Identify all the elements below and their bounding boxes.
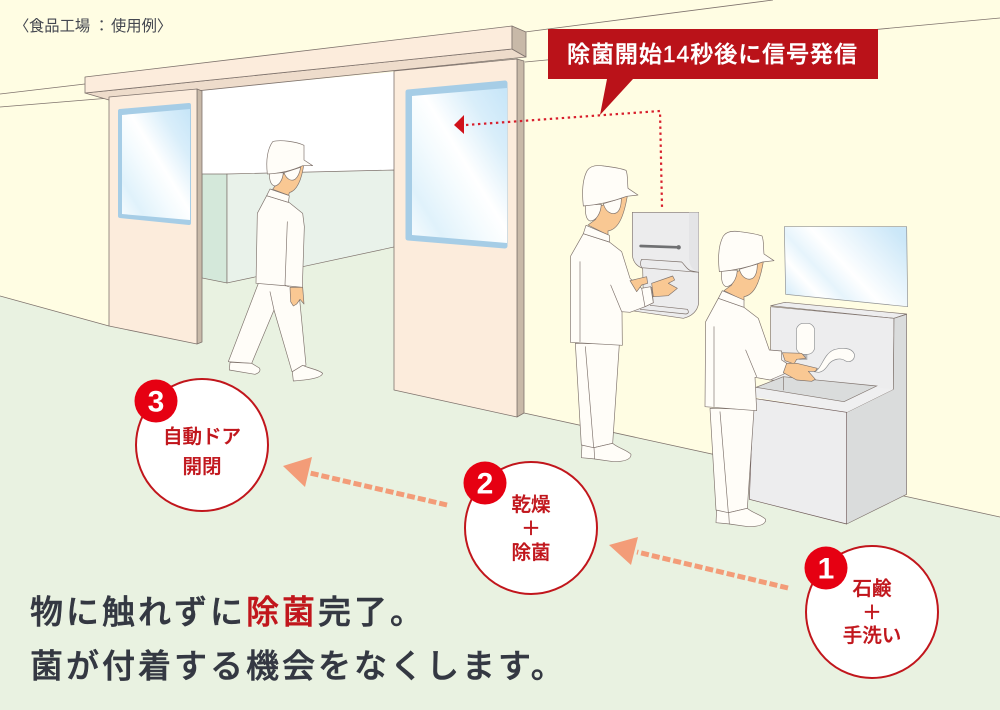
step 3 circle: [134, 379, 268, 511]
callout: [548, 29, 878, 115]
main message: 菌が付着する機会をなくします。: [30, 648, 567, 684]
top label: ：: [94, 18, 109, 35]
step 3 circle: 開閉: [182, 456, 222, 478]
callout: 除菌開始14秒後に信号発信: [567, 41, 857, 67]
badge 2: 2: [477, 468, 493, 500]
left door: [109, 89, 202, 344]
soap dispenser: [796, 323, 815, 360]
right door: [394, 59, 524, 417]
step 1 circle: 手洗い: [843, 625, 901, 647]
ceiling lines: [0, 0, 1000, 107]
top label: 使用例〉: [111, 18, 172, 35]
faucet: [814, 348, 854, 372]
arrow from step 1 to step 2: [609, 537, 788, 588]
sensor rod: [641, 246, 678, 247]
step 3 circle: 自動ドア: [163, 426, 241, 448]
left door window: [120, 105, 190, 223]
mirror: [784, 227, 908, 307]
dotted signal line: [466, 111, 662, 207]
sink cabinet: [771, 302, 907, 318]
step 2 circle: [464, 462, 597, 594]
badge 3: 3: [148, 386, 164, 418]
top label: 〈: [14, 18, 29, 35]
signal arrowhead: [454, 115, 464, 134]
person walking through door: [228, 141, 323, 381]
badge 1: 1: [818, 552, 834, 586]
step 1 circle: 石鹸: [852, 578, 892, 600]
step 1 circle: ＋: [862, 602, 882, 624]
arrow from step 2 to step 3: [283, 457, 447, 505]
right door window: [408, 83, 507, 246]
main message: [30, 594, 567, 684]
wash station: [749, 227, 908, 524]
dryer unit: [632, 212, 699, 318]
floor: [0, 247, 1000, 710]
step 2 circle: ＋: [521, 518, 541, 540]
back room through the doorway: [202, 72, 394, 283]
top label: 食品工場: [29, 18, 90, 35]
main message: 物に触れずに除菌完了。: [30, 594, 426, 630]
wall and floor boundary: [0, 296, 1000, 517]
door header beam: [85, 26, 526, 100]
person at dryer: [570, 166, 677, 462]
step 2 circle: 除菌: [511, 542, 551, 564]
step 1 circle: [804, 546, 938, 678]
person at sink: [705, 231, 817, 527]
step 2 circle: 乾燥: [511, 494, 551, 516]
